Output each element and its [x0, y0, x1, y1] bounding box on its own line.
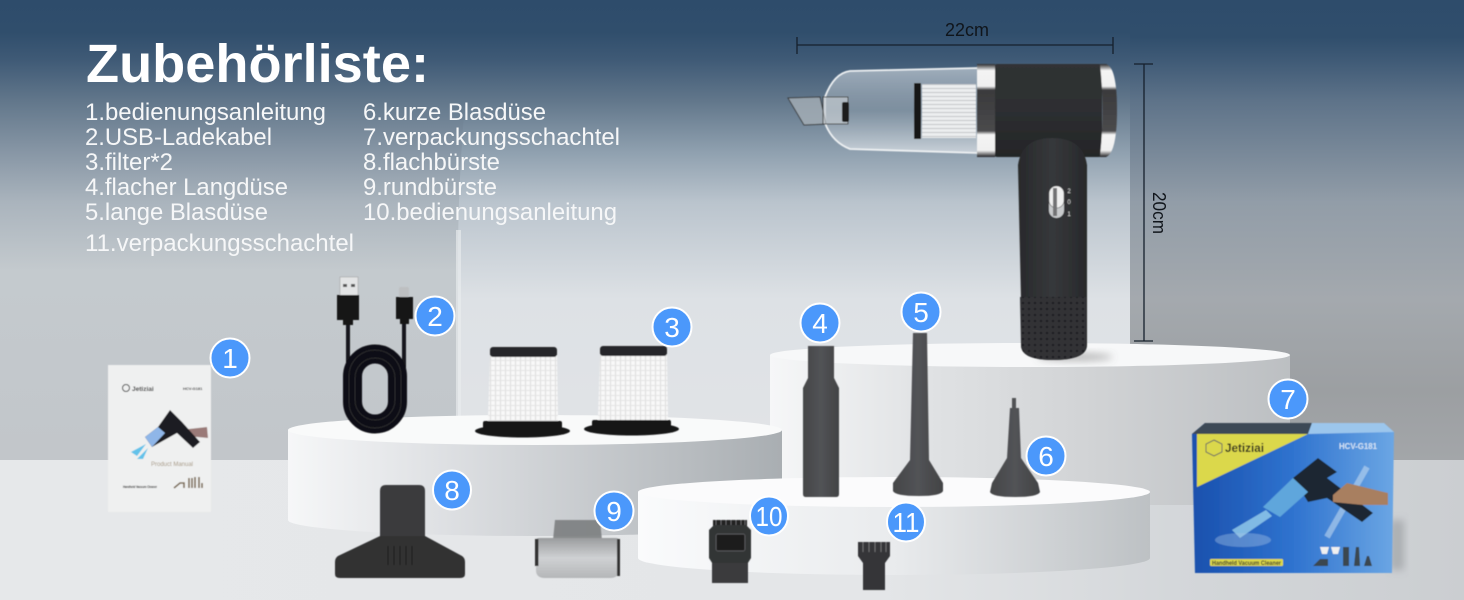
item 4: flat long nozzle: [803, 346, 839, 497]
item 9: round brush: [535, 520, 620, 578]
number badges: [210, 292, 1308, 542]
accessory list: 2.USB-Ladekabel: [85, 124, 272, 151]
item 6: short blow nozzle: [990, 398, 1040, 497]
accessory list: 5.lange Blasdüse: [85, 199, 268, 226]
item 3: two filters: [475, 346, 679, 438]
accessory list: 8.flachbürste: [363, 149, 500, 176]
dimension: width 22cm: [797, 20, 1113, 54]
item 8: flat brush: [335, 485, 465, 578]
badge 6: 6: [1038, 441, 1054, 472]
badge 3: 3: [664, 312, 680, 343]
item 7: product box: [1192, 423, 1404, 573]
badge 2: [416, 296, 454, 336]
dimension: width 22cm: 22cm: [945, 20, 989, 40]
pedestal: left: [288, 415, 782, 536]
motor body: [994, 64, 1102, 157]
item 1: manual: [108, 365, 211, 512]
badge 6: [1026, 436, 1066, 476]
pedestal: back right: [770, 343, 1290, 505]
switch: [1049, 186, 1071, 218]
switch: 0: [1067, 200, 1071, 206]
badge 3: [652, 308, 692, 346]
switch: 1: [1067, 212, 1071, 218]
vacuum image on box: [1215, 458, 1388, 547]
item 1: manual: Product Manual: [151, 462, 193, 468]
rear chrome ring: [1100, 64, 1117, 157]
grille: [1020, 297, 1086, 360]
accessory list: 7.verpackungsschachtel: [363, 124, 620, 151]
accessory list: 9.rundbürste: [363, 174, 497, 201]
badge 10: [750, 496, 788, 536]
accessory list: 3.filter*2: [85, 149, 173, 176]
filter right: [584, 346, 679, 436]
dimension: height 20cm: [1134, 64, 1169, 341]
accessory list: 1.bedienungsanleitung: [85, 99, 326, 126]
badge 10: 10: [756, 501, 782, 532]
item 1: manual: Jetiziai: [132, 386, 154, 393]
item 2: USB cable: [337, 277, 413, 428]
pedestal: front: [638, 477, 1150, 575]
item 11: small brush: [858, 542, 890, 590]
dimension: height 20cm: 20cm: [1149, 192, 1169, 234]
handle: [1018, 138, 1087, 360]
filter seal: [914, 83, 921, 139]
badge 8: [433, 470, 471, 510]
accessory list: 11.verpackungsschachtel: [85, 230, 354, 257]
item 7: product box: Jetiziai: [1225, 441, 1264, 455]
badge 1: 1: [222, 343, 238, 374]
badge 7: [1268, 380, 1308, 418]
badge 5: 5: [913, 297, 929, 328]
accessory list: 6.kurze Blasdüse: [363, 99, 546, 126]
item 10: slot brush: [709, 520, 751, 583]
title: Zubehörliste:: [86, 34, 429, 94]
badge 9: [594, 492, 634, 530]
switch: 2: [1067, 189, 1071, 195]
badge 8: 8: [444, 475, 460, 506]
item 1: manual: Handheld Vacuum Cleaner: [123, 484, 157, 489]
clear dust cup: [825, 68, 978, 153]
badge 4: 4: [812, 308, 828, 339]
badge 4: [800, 304, 840, 342]
handheld vacuum: [788, 64, 1117, 361]
badge 11: [887, 502, 925, 542]
item 7: product box: Handheld Vacuum Cleaner: [1212, 561, 1282, 567]
badge 5: [902, 292, 940, 332]
badge 9: 9: [606, 496, 622, 527]
badge 2: 2: [427, 301, 443, 332]
badge 11: 11: [892, 507, 920, 538]
filter left: [475, 347, 570, 438]
item 1: manual: HCV-G181: [183, 386, 203, 391]
item 5: long blow nozzle: [893, 333, 943, 496]
accessory list: 10.bedienungsanleitung: [363, 199, 617, 226]
accessory list: 4.flacher Langdüse: [85, 174, 288, 201]
pleated filter: [922, 84, 976, 138]
badge 1: [210, 338, 250, 378]
item 7: product box: HCV-G181: [1339, 442, 1378, 451]
front chrome ring: [977, 64, 995, 157]
badge 7: 7: [1280, 384, 1296, 415]
accessory list: [85, 99, 620, 257]
nozzle: [788, 97, 849, 125]
